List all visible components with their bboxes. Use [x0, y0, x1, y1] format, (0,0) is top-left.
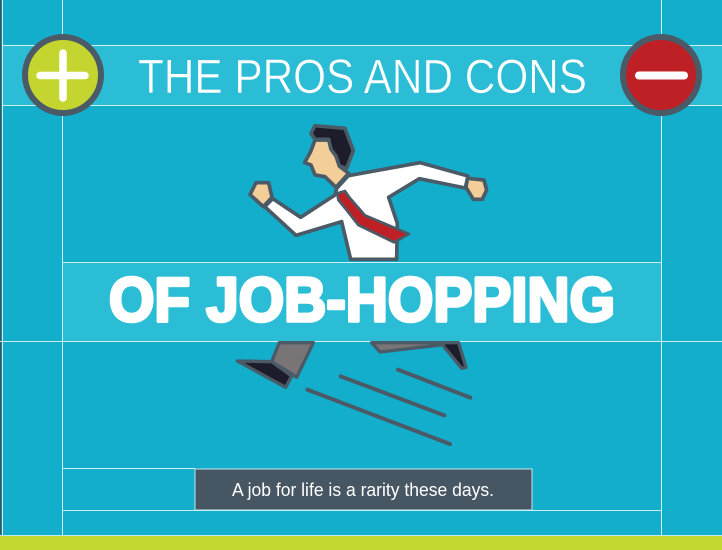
far leg	[372, 343, 443, 352]
running man: upper body	[250, 126, 487, 259]
shirt	[265, 163, 468, 259]
running man: legs and speed lines	[237, 343, 470, 444]
icon: far fist	[466, 178, 487, 199]
icon: near fist	[250, 183, 272, 207]
minus icon	[623, 37, 699, 113]
title band: top	[2, 45, 722, 105]
caption box: A job for life is a rarity these days.	[232, 480, 494, 500]
speed lines	[307, 370, 470, 444]
title band: middle	[62, 262, 661, 341]
neck and face	[305, 140, 349, 187]
far shoe	[443, 343, 466, 368]
bottom green bar	[0, 535, 722, 550]
title line two: OF JOB-HOPPING	[109, 266, 615, 335]
near shoe	[237, 361, 292, 387]
plus icon	[25, 37, 101, 113]
hair	[311, 126, 353, 168]
caption box	[195, 469, 532, 510]
near leg	[272, 343, 313, 377]
title line one: THE PROS AND CONS	[138, 51, 587, 104]
tie	[337, 191, 409, 242]
